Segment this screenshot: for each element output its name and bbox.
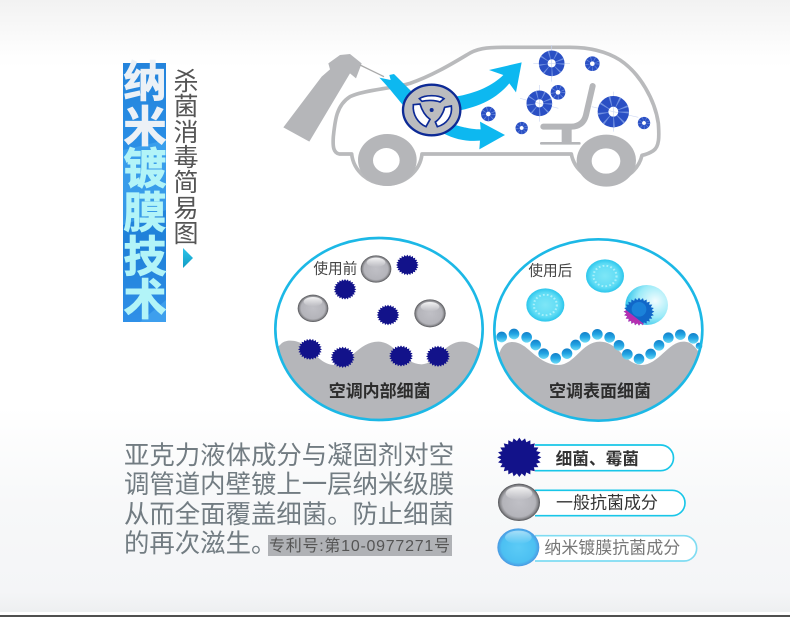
front wheel [358, 134, 417, 186]
legend item: bacteria and mould: 细菌、霉菌 [556, 449, 639, 468]
seat [541, 86, 593, 143]
legend item: nano coating antibacterial component: 纳米镀膜抗菌成分 [544, 539, 680, 558]
icon: caption arrow [183, 248, 193, 268]
legend item: nano coating antibacterial component [497, 528, 697, 566]
legend item: general antibacterial component: 一般抗菌成分 [556, 493, 658, 512]
legend item: bacteria and mould [497, 438, 673, 477]
heading: vertical title bar: 术 [124, 277, 166, 325]
subheading: vertical caption: 杀 [173, 68, 199, 96]
subheading: vertical caption: 消 [173, 119, 199, 147]
patent number: 专利号:第10-0977271号 [269, 537, 450, 555]
circle outline [275, 238, 483, 420]
bacteria [298, 255, 450, 368]
coated sphere capturing bacterium [624, 285, 668, 326]
rear wheel [577, 135, 636, 187]
subheading: vertical caption: 简 [173, 169, 199, 197]
label: duct surface bacteria: 空调表面细菌 [549, 381, 651, 401]
subheading: vertical caption: 菌 [173, 93, 199, 121]
bottom rule [0, 612, 790, 617]
duct surface [499, 342, 698, 420]
icon: air conditioner fan [403, 85, 460, 135]
nano coating beads [496, 329, 702, 364]
bacteria in cabin [483, 45, 648, 132]
legend [497, 438, 697, 566]
text block: description: 亚克力液体成分与凝固剂对空 [124, 442, 454, 470]
grey antibacterial spheres [298, 255, 446, 327]
heading: vertical title bar: 镀 [124, 146, 166, 194]
text block: description: 从而全面覆盖细菌。防止细菌 [124, 501, 454, 529]
subheading: vertical caption: 图 [173, 220, 199, 248]
circle outline [494, 239, 702, 421]
text block: description: 的再次滋生。 [124, 530, 276, 558]
heading: vertical title bar: 技 [124, 234, 166, 282]
coated spheres [526, 259, 624, 322]
text block: description: 调管道内壁镀上一层纳米级膜 [124, 471, 454, 499]
label: before use: 使用前 [313, 261, 357, 278]
heading: vertical title bar [123, 59, 166, 325]
heading: vertical title bar: 纳 [124, 59, 166, 107]
panel: after use [494, 239, 703, 430]
car body outline [333, 47, 659, 184]
duct surface [278, 340, 479, 419]
arrow: nozzle airflow [379, 74, 412, 110]
panel: before use [272, 238, 487, 430]
subheading: vertical caption [173, 68, 199, 248]
arrow: upper airflow [455, 62, 522, 111]
heading: vertical title bar: 米 [124, 104, 166, 152]
label: duct interior bacteria: 空调内部细菌 [329, 381, 431, 401]
legend item: general antibacterial component [498, 484, 685, 521]
car diagram [283, 45, 659, 187]
subheading: vertical caption: 易 [173, 195, 199, 223]
subheading: vertical caption: 毒 [173, 144, 199, 172]
arrow: lower airflow [443, 122, 505, 149]
heading: vertical title bar: 膜 [124, 190, 166, 238]
label: after use: 使用后 [528, 262, 572, 279]
text block: description [124, 442, 454, 558]
spray can [283, 54, 384, 142]
